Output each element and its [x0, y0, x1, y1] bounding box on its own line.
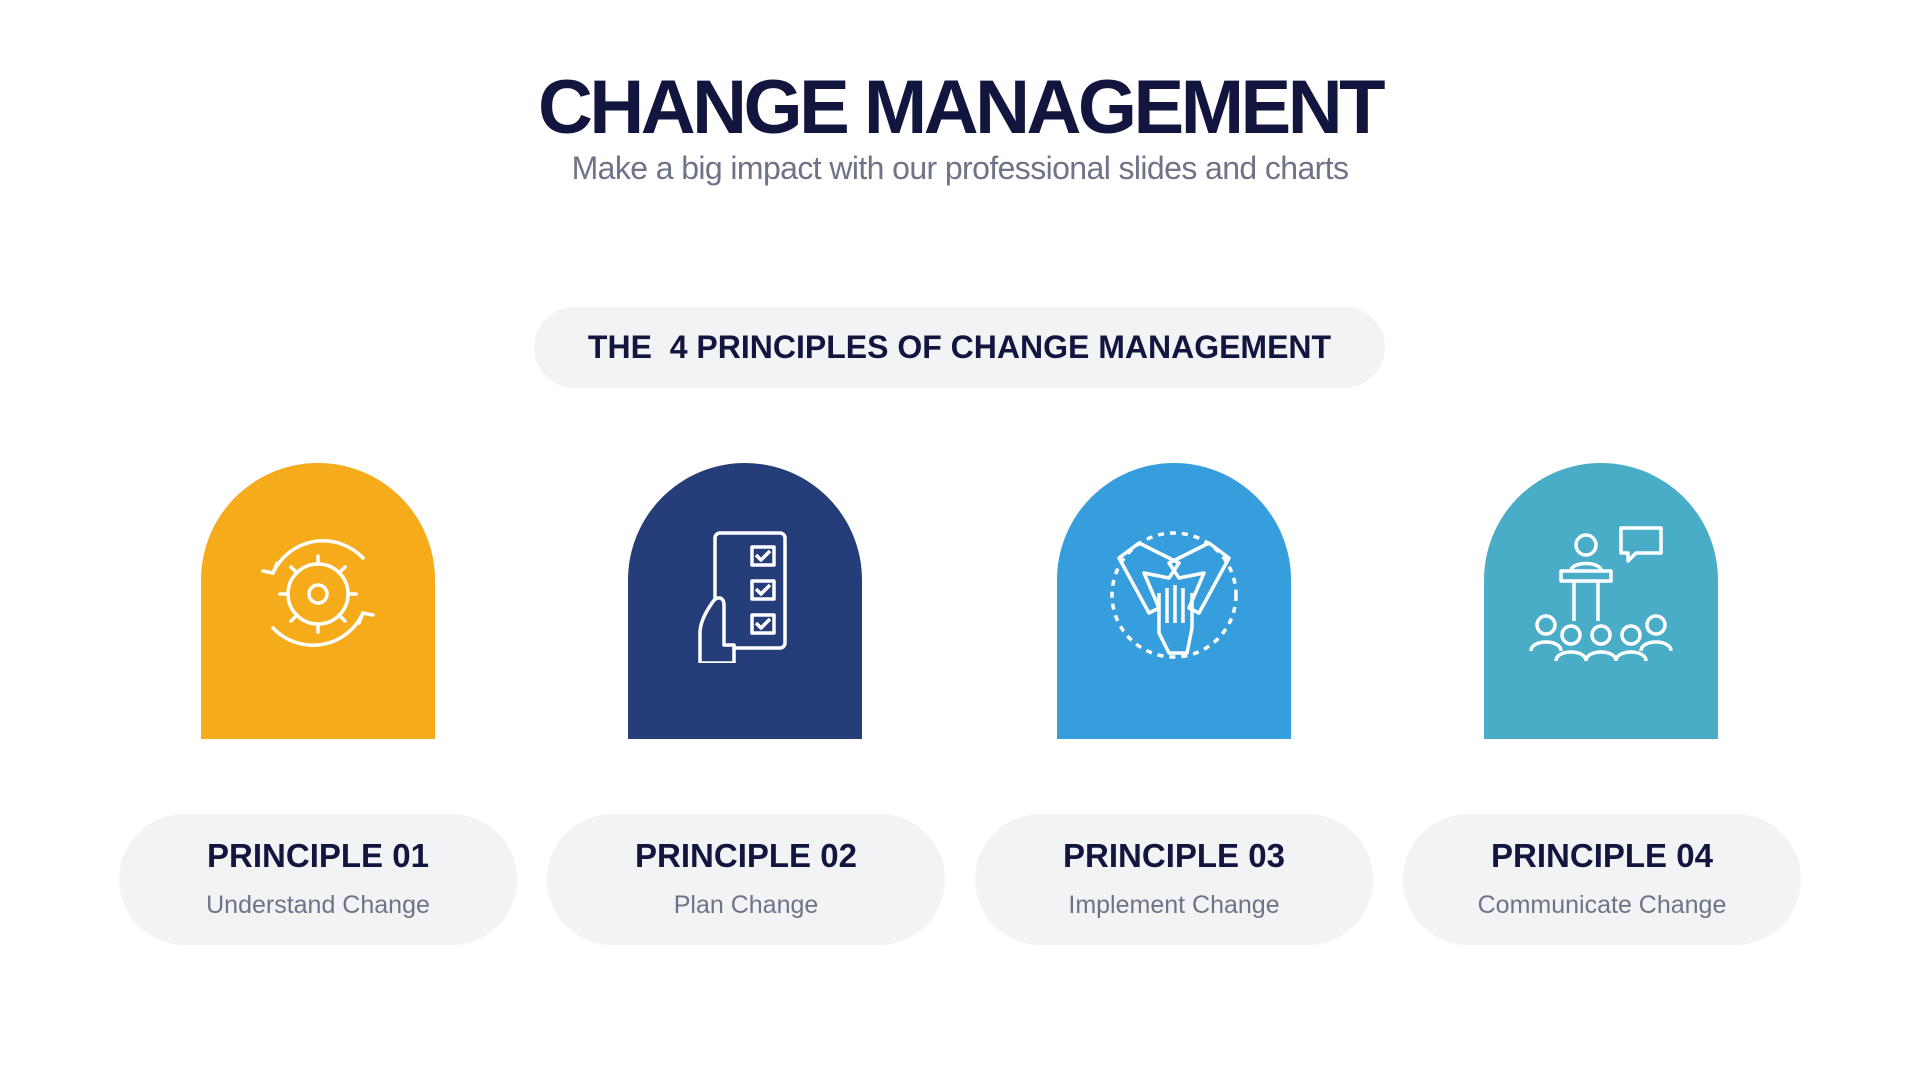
icon: checklist in hand [698, 531, 787, 663]
card: principle 01: PRINCIPLE 01 [207, 837, 429, 874]
card: principle 03: PRINCIPLE 03 [1063, 837, 1285, 874]
card: principle 03: Implement Change [1068, 891, 1280, 919]
icon: gear with cycle arrows [261, 539, 375, 647]
card: principle 04 [1403, 814, 1801, 945]
panel: principle 4 arch [1484, 463, 1718, 739]
panel: principle 3 arch [1057, 463, 1291, 739]
card: principle 04: PRINCIPLE 04 [1491, 837, 1713, 874]
card: principle 01: Understand Change [206, 891, 430, 919]
panel: principle 2 arch [628, 463, 862, 739]
card: principle 01 [119, 814, 517, 945]
card: principle 03 [975, 814, 1373, 945]
panel: principle 1 arch [201, 463, 435, 739]
card: principle 02: PRINCIPLE 02 [635, 837, 857, 874]
subtitle: Make a big impact with our professional slides and charts [572, 150, 1348, 186]
icon: hands together [1110, 531, 1238, 659]
section heading pill: THE 4 PRINCIPLES OF CHANGE MANAGEMENT [588, 329, 1331, 365]
section heading pill [534, 307, 1385, 388]
card: principle 02: Plan Change [674, 891, 818, 919]
title: CHANGE MANAGEMENT [538, 65, 1382, 150]
card: principle 04: Communicate Change [1478, 891, 1726, 919]
card: principle 02 [547, 814, 945, 945]
icon: speaker at podium with audience [1529, 526, 1673, 661]
